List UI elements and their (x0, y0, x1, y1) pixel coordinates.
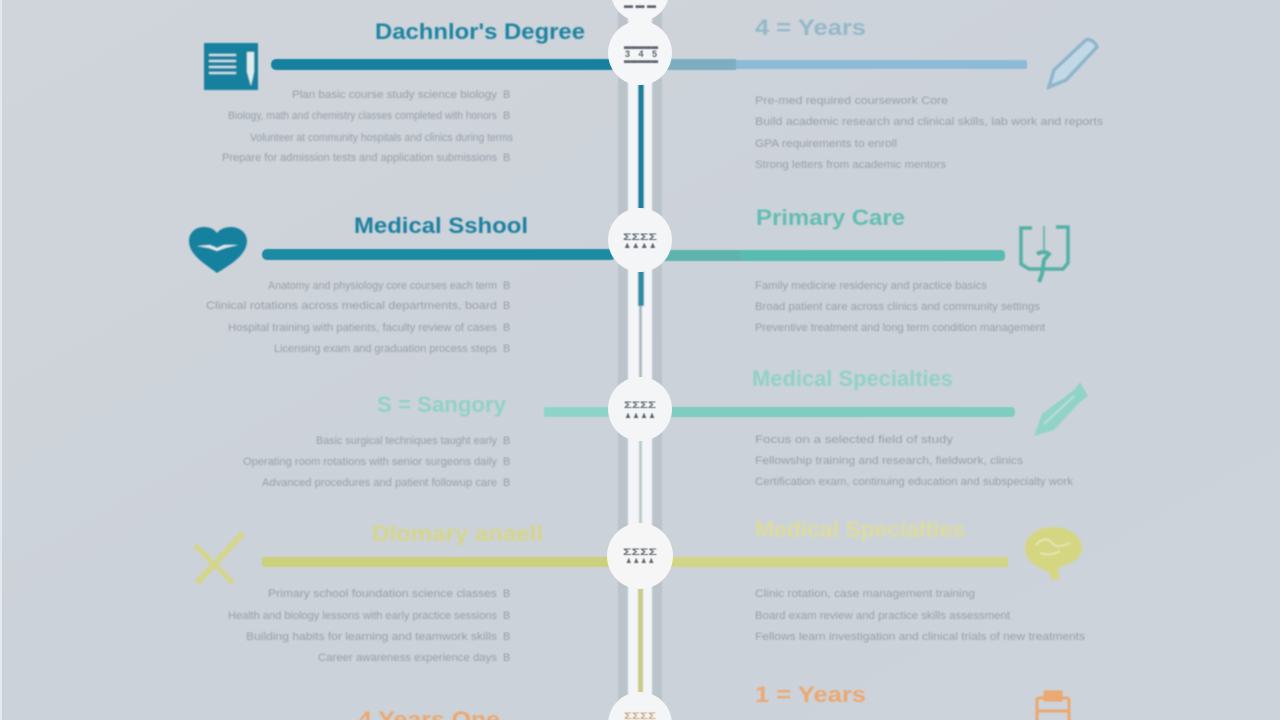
node: row 4: ▲▲▲▲ (625, 555, 655, 565)
text block: left row 2: B (503, 300, 510, 312)
node: top partial: ▬ ▬ ▬ (624, 0, 656, 10)
text block: left row 4 (228, 588, 510, 664)
text block: left row 4: Primary school foundation science classes (268, 588, 498, 600)
text block: left row 1: Volunteer at community hospitals and clinics during terms (250, 132, 513, 144)
text block: left row 4: Career awareness experience days (318, 652, 498, 664)
icon: stethoscope (1021, 226, 1068, 282)
text block: left row 4: B (503, 610, 510, 622)
text block: right row 4 (755, 588, 1086, 643)
text block: left row 1: Prepare for admission tests and application submissions (222, 152, 497, 164)
heading: left row 3: S = Sangory (377, 392, 507, 417)
text block: left row 1: B (503, 110, 510, 122)
text block: right row 3 (755, 434, 1074, 488)
icon: syringe (1034, 382, 1088, 436)
heading: left row 4: Dlomary anaell (372, 521, 543, 546)
text block: left row 4: B (503, 652, 510, 664)
text block: right row 3: Certification exam, continuing education and subspecialty work (755, 476, 1074, 488)
text block: left row 4: Health and biology lessons with early practice sessions (228, 610, 497, 622)
text block: left row 3: B (503, 456, 510, 468)
row 3 left: bar (544, 407, 614, 417)
row 2 left: bar (262, 249, 616, 260)
text block: left row 2: B (503, 343, 510, 355)
node: row 2: ▲▲▲▲ (623, 240, 657, 250)
text block: right row 1: Build academic research and clinical skills, lab work and reports (755, 116, 1104, 128)
heading: left row 1: Dachnlor's Degree (375, 19, 585, 44)
text block: right row 1: Pre-med required coursework Core (755, 95, 948, 107)
text block: left row 2 (206, 280, 510, 355)
text block: right row 2: Preventive treatment and long term condition management (755, 322, 1045, 334)
icon: heart (189, 227, 247, 273)
node: row 5 partial (608, 692, 672, 720)
icon: pencil (1049, 40, 1097, 87)
row 1 right: bar (666, 59, 1027, 70)
heading: right row 3: Medical Specialties (752, 366, 953, 391)
node: row 1: 3 4 5 (625, 49, 657, 59)
text block: right row 4: Board exam review and practice skills assessment (755, 610, 1010, 622)
node: row 4 (607, 523, 673, 589)
text block: right row 3: Fellowship training and research, fieldwork, clinics (755, 455, 1024, 467)
text block: left row 1 (222, 89, 513, 164)
text block: left row 2: Licensing exam and graduation process steps (274, 343, 497, 355)
text block: left row 1: Plan basic course study science biology (292, 89, 498, 101)
text block: left row 4: Building habits for learning and teamwork skills (246, 631, 498, 643)
text block: left row 3: B (503, 477, 510, 489)
node: row 4: ΣΣΣΣ (623, 547, 658, 557)
node: row 2: ΣΣΣΣ (623, 232, 658, 242)
text block: right row 2: Broad patient care across clinics and community settings (755, 301, 1041, 313)
text block: left row 1: Biology, math and chemistry classes completed with honors (228, 110, 497, 122)
text block: right row 3: Focus on a selected field of study (755, 434, 954, 446)
text block: left row 3: B (503, 435, 510, 447)
text block: left row 1: B (503, 152, 510, 164)
node: row 1: ▬▬▬▬▬ (624, 41, 658, 51)
text block: right row 2 (755, 280, 1045, 334)
text block: left row 2: Clinical rotations across medical departments, board (206, 300, 497, 312)
text block: left row 1: B (503, 89, 510, 101)
node: row 1: ▬▬▬▬▬ (624, 55, 658, 65)
text block: left row 2: B (503, 322, 510, 334)
text block: left row 3: Operating room rotations with senior surgeons daily (243, 456, 498, 468)
icon: crossed tools (195, 533, 243, 583)
text block: right row 2: Family medicine residency and practice basics (755, 280, 987, 292)
icon: clipboard (1037, 692, 1069, 720)
node: row 3: ΣΣΣΣ (624, 400, 657, 410)
text block: right row 1: Strong letters from academic mentors (755, 159, 947, 171)
heading: right row 4: Medical Specialties (755, 517, 965, 542)
text block: left row 2: Hospital training with patients, faculty review of cases (228, 322, 498, 334)
text block: left row 3 (243, 435, 510, 489)
text block: right row 1 (755, 95, 1104, 171)
node: row 3 (608, 377, 672, 441)
text block: left row 4: B (503, 631, 510, 643)
heading: left row 2: Medical Sshool (354, 213, 528, 238)
row 2 right: bar (664, 250, 1005, 261)
row 4 right: bar (668, 557, 1008, 567)
node: row 2 (608, 208, 672, 272)
icon: brain (1025, 527, 1082, 580)
text block: left row 4: B (503, 588, 510, 600)
text block: left row 2: Anatomy and physiology core courses each term (268, 280, 497, 292)
text block: right row 4: Clinic rotation, case management training (755, 588, 975, 600)
text block: right row 4: Fellows learn investigation and clinical trials of new treatments (755, 631, 1086, 643)
heading: right row 5: 1 = Years (755, 682, 866, 707)
node: row 3: ▲▲▲▲ (624, 410, 656, 420)
row 3 right: bar (668, 407, 1015, 417)
heading: right row 1: 4 = Years (755, 15, 866, 40)
icon: document (204, 43, 258, 90)
row 1 left: bar (271, 59, 616, 70)
text block: left row 3: Basic surgical techniques taught early (316, 435, 497, 447)
node: top partial (611, 0, 669, 21)
row 4 left: bar (262, 557, 612, 567)
node: row 1 (608, 21, 672, 85)
text block: left row 2: B (503, 280, 510, 292)
text block: left row 3: Advanced procedures and patient followup care (262, 477, 497, 489)
heading: right row 2: Primary Care (756, 205, 905, 230)
central timeline spine (618, 0, 662, 720)
text block: right row 1: GPA requirements to enroll (755, 138, 897, 150)
